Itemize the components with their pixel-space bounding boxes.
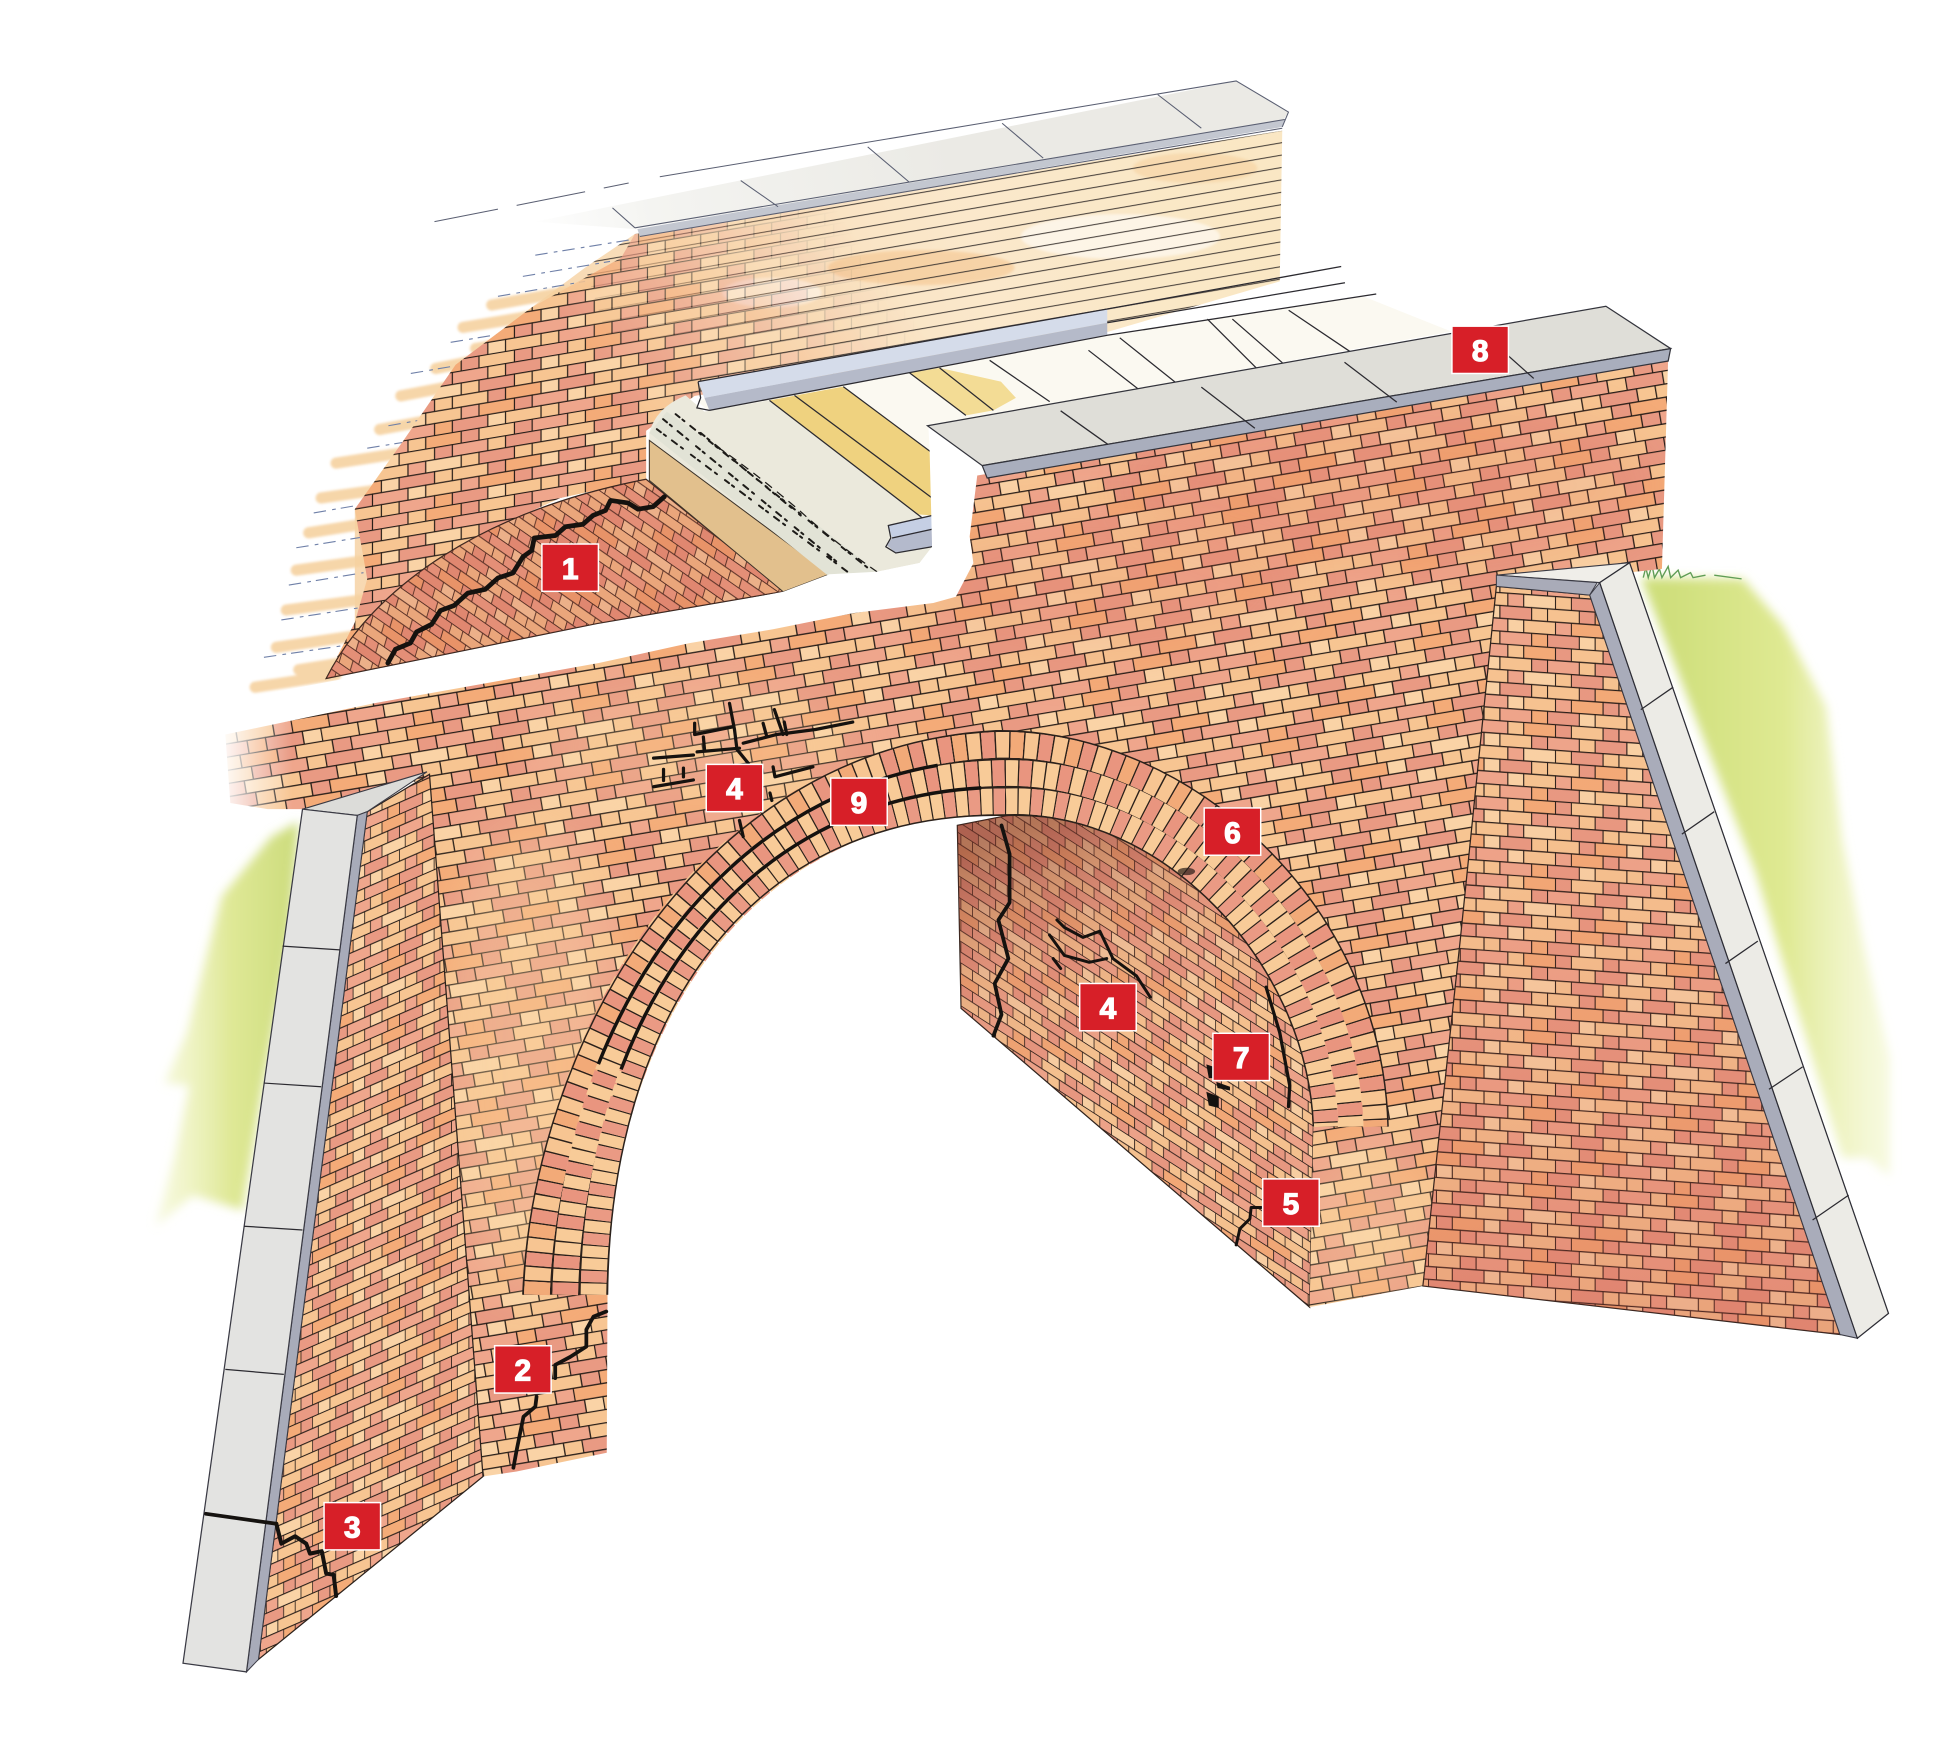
- badge 5: [1263, 1179, 1319, 1226]
- left coping shaded side: [246, 812, 367, 1672]
- right coping under-edge: [1496, 575, 1597, 595]
- right wing coping stones: [1496, 563, 1889, 1338]
- grass: right embankment: [1641, 565, 1890, 1176]
- crack: vault spalled patch (defect 4): [1049, 920, 1150, 997]
- crack: vault longitudinal crack: [993, 825, 1010, 1036]
- crack: stepped crack in wing wall (defect 3): [276, 1524, 336, 1596]
- crack: missing bricks (defect 7): [1206, 1064, 1230, 1108]
- front wall: watercolour tone variation: [442, 398, 1656, 1320]
- vault shading: [957, 815, 1313, 1307]
- grass: left embankment: [156, 822, 299, 1226]
- rear arch brickwork: [326, 479, 784, 678]
- badge 4: vault: 4: [1100, 992, 1117, 1025]
- badge 4: spandrel: [706, 764, 763, 812]
- arch ring outline: [523, 731, 1388, 1295]
- badge 7: 7: [1233, 1042, 1249, 1075]
- left coping light face: [183, 809, 357, 1672]
- crack through left coping (defect 3): [206, 1514, 276, 1524]
- badge 2: [495, 1346, 551, 1393]
- concrete slab: [649, 395, 932, 574]
- cracks on brick faces: [276, 703, 1290, 1596]
- front parapet coping stones: [927, 306, 1671, 478]
- white cut-away band between rear and front wall: [219, 425, 980, 738]
- ring separation cracks (defect 9): [551, 759, 1004, 1295]
- badge 4: vault: [1080, 983, 1136, 1031]
- crack: foot of vault (defect 5): [1236, 1208, 1261, 1245]
- badge 8: [1452, 326, 1508, 373]
- badge 8: 8: [1472, 335, 1488, 368]
- left coping cap: [303, 772, 427, 815]
- rear arch barrel with crack (defect 1): [326, 479, 784, 678]
- back parapet coping stones: [434, 81, 1288, 237]
- back wall: wash patches: [722, 153, 1257, 307]
- badge 5: 5: [1283, 1188, 1299, 1221]
- crack in rear arch: [388, 497, 664, 663]
- front coping top surface: [927, 306, 1671, 466]
- crack: dark crown staining: [1178, 868, 1195, 875]
- arch ring: outer course: [537, 745, 1376, 1295]
- back wall: left brush streaks: [255, 286, 598, 687]
- sand layer: [649, 440, 829, 592]
- arch ring: middle course: [565, 773, 1351, 1295]
- badge 1: [542, 544, 598, 591]
- left wing coping stones: [183, 772, 427, 1672]
- badge 2: 2: [515, 1355, 531, 1388]
- crack: pier crack (defect 2): [513, 1312, 606, 1468]
- far running rail: [697, 266, 1376, 410]
- ballast band: [649, 412, 877, 577]
- right coping shaded side: [1590, 583, 1857, 1338]
- badge 7: [1213, 1033, 1269, 1081]
- crack: spalled spandrel brickwork (defect 4): [654, 703, 853, 837]
- track bed cross-section: [649, 266, 1451, 592]
- arch ring: inner course: [593, 801, 1326, 1295]
- badge 4: spandrel: 4: [726, 773, 743, 806]
- back wall: brick courses: [336, 210, 906, 658]
- badge 9: [831, 778, 887, 825]
- back wall: dashed fading course lines: [264, 239, 635, 657]
- back wall: pale wash: [326, 131, 1282, 678]
- yellow sleeper bed far: [910, 368, 1016, 415]
- brick arch ring with three courses of voussoirs: [523, 731, 1388, 1295]
- badge 1: 1: [562, 553, 578, 586]
- right coping light top: [1600, 563, 1889, 1338]
- arch ring mortar base: [523, 731, 1388, 1295]
- front coping face: [982, 349, 1671, 478]
- back wall behind the track: [255, 131, 1282, 687]
- inner vault wall seen through arch: [957, 815, 1313, 1307]
- near running rail: [886, 515, 932, 553]
- left wing wall: [258, 774, 483, 1659]
- badge 3: 3: [344, 1511, 361, 1544]
- badge 6: [1204, 808, 1261, 855]
- crack: vault-ring separation (defect 6): [1266, 987, 1290, 1107]
- right coping cap: [1496, 563, 1630, 583]
- badge 6: 6: [1224, 817, 1241, 850]
- sleeper and deck lines: [769, 310, 1357, 525]
- front spandrel wall brickwork: [218, 359, 1668, 1476]
- back wall: mortar course lines: [585, 131, 1282, 396]
- right wing wall: [1423, 586, 1840, 1335]
- badge 9: 9: [851, 787, 867, 820]
- deck surface: [697, 297, 1451, 572]
- yellow sleeper bed near: [769, 387, 932, 515]
- badge 3: [324, 1503, 381, 1550]
